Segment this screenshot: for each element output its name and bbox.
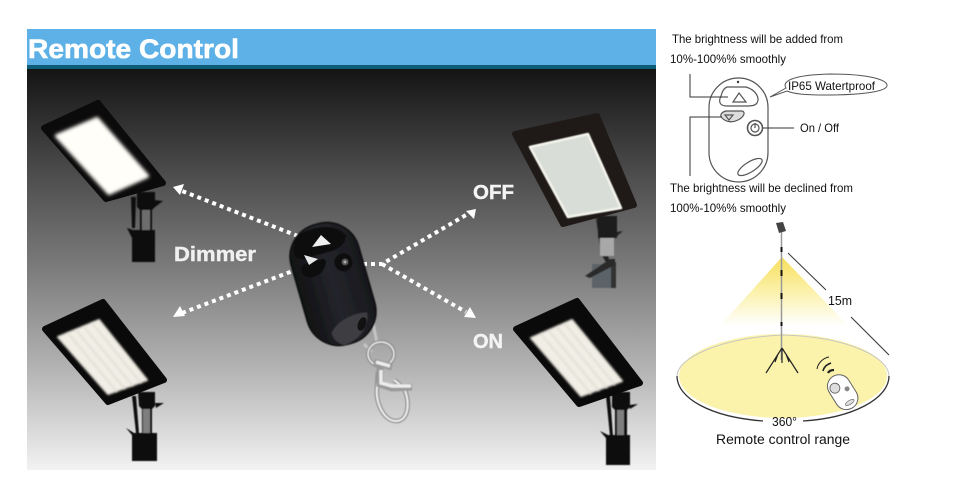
text: brightness down: The brightness will be declined from (670, 181, 853, 195)
text: brightness up range: 10%-100%% smoothly (670, 52, 786, 66)
arrow: to OFF lamp (355, 209, 476, 264)
diagram: remote button guide (670, 32, 887, 215)
lamp: top left, bright (44, 103, 163, 262)
photo: black key fob (282, 215, 412, 421)
icon: signal waves (817, 357, 834, 373)
lamp: bottom right, on (516, 301, 640, 465)
label: 15m: 15m (828, 293, 852, 308)
label: OFF: OFF (473, 182, 514, 204)
dimension lines: 15m (788, 253, 889, 355)
callout: IP65 Watertproof (770, 74, 887, 97)
icon: small remote (823, 370, 862, 414)
banner title: Remote Control (28, 34, 239, 64)
leader line: up button (690, 74, 728, 97)
leader line: on off (763, 127, 794, 129)
lamp: top right, off (515, 116, 634, 288)
diagram: remote control range (677, 222, 889, 447)
key ring and clasp (364, 323, 412, 421)
label: On / Off: On / Off (800, 121, 840, 135)
panel: remote control photo (27, 29, 656, 470)
text: brightness up: The brightness will be added from (672, 32, 843, 46)
light cone (709, 257, 860, 338)
label: 360 degrees: 360° (772, 414, 797, 429)
leader line: down button (690, 117, 722, 176)
arrow: to bottom left lamp (173, 269, 298, 317)
label: ON: ON (473, 331, 503, 353)
label: Dimmer: Dimmer (174, 244, 256, 266)
text: brightness down range: 100%-10%% smoothly (670, 201, 786, 215)
tripod and lamp (766, 222, 798, 373)
callout: IP65 Watertproof: IP65 Watertproof (788, 79, 876, 93)
arrow: to ON lamp (382, 264, 476, 318)
range outline (677, 335, 889, 376)
remote outline (709, 78, 768, 182)
light pool (679, 334, 887, 418)
lamp: bottom left, dimmed (45, 302, 164, 461)
arrow: to top left lamp (173, 184, 298, 236)
label: Remote control range: Remote control range (716, 432, 850, 447)
header banner (27, 29, 656, 69)
